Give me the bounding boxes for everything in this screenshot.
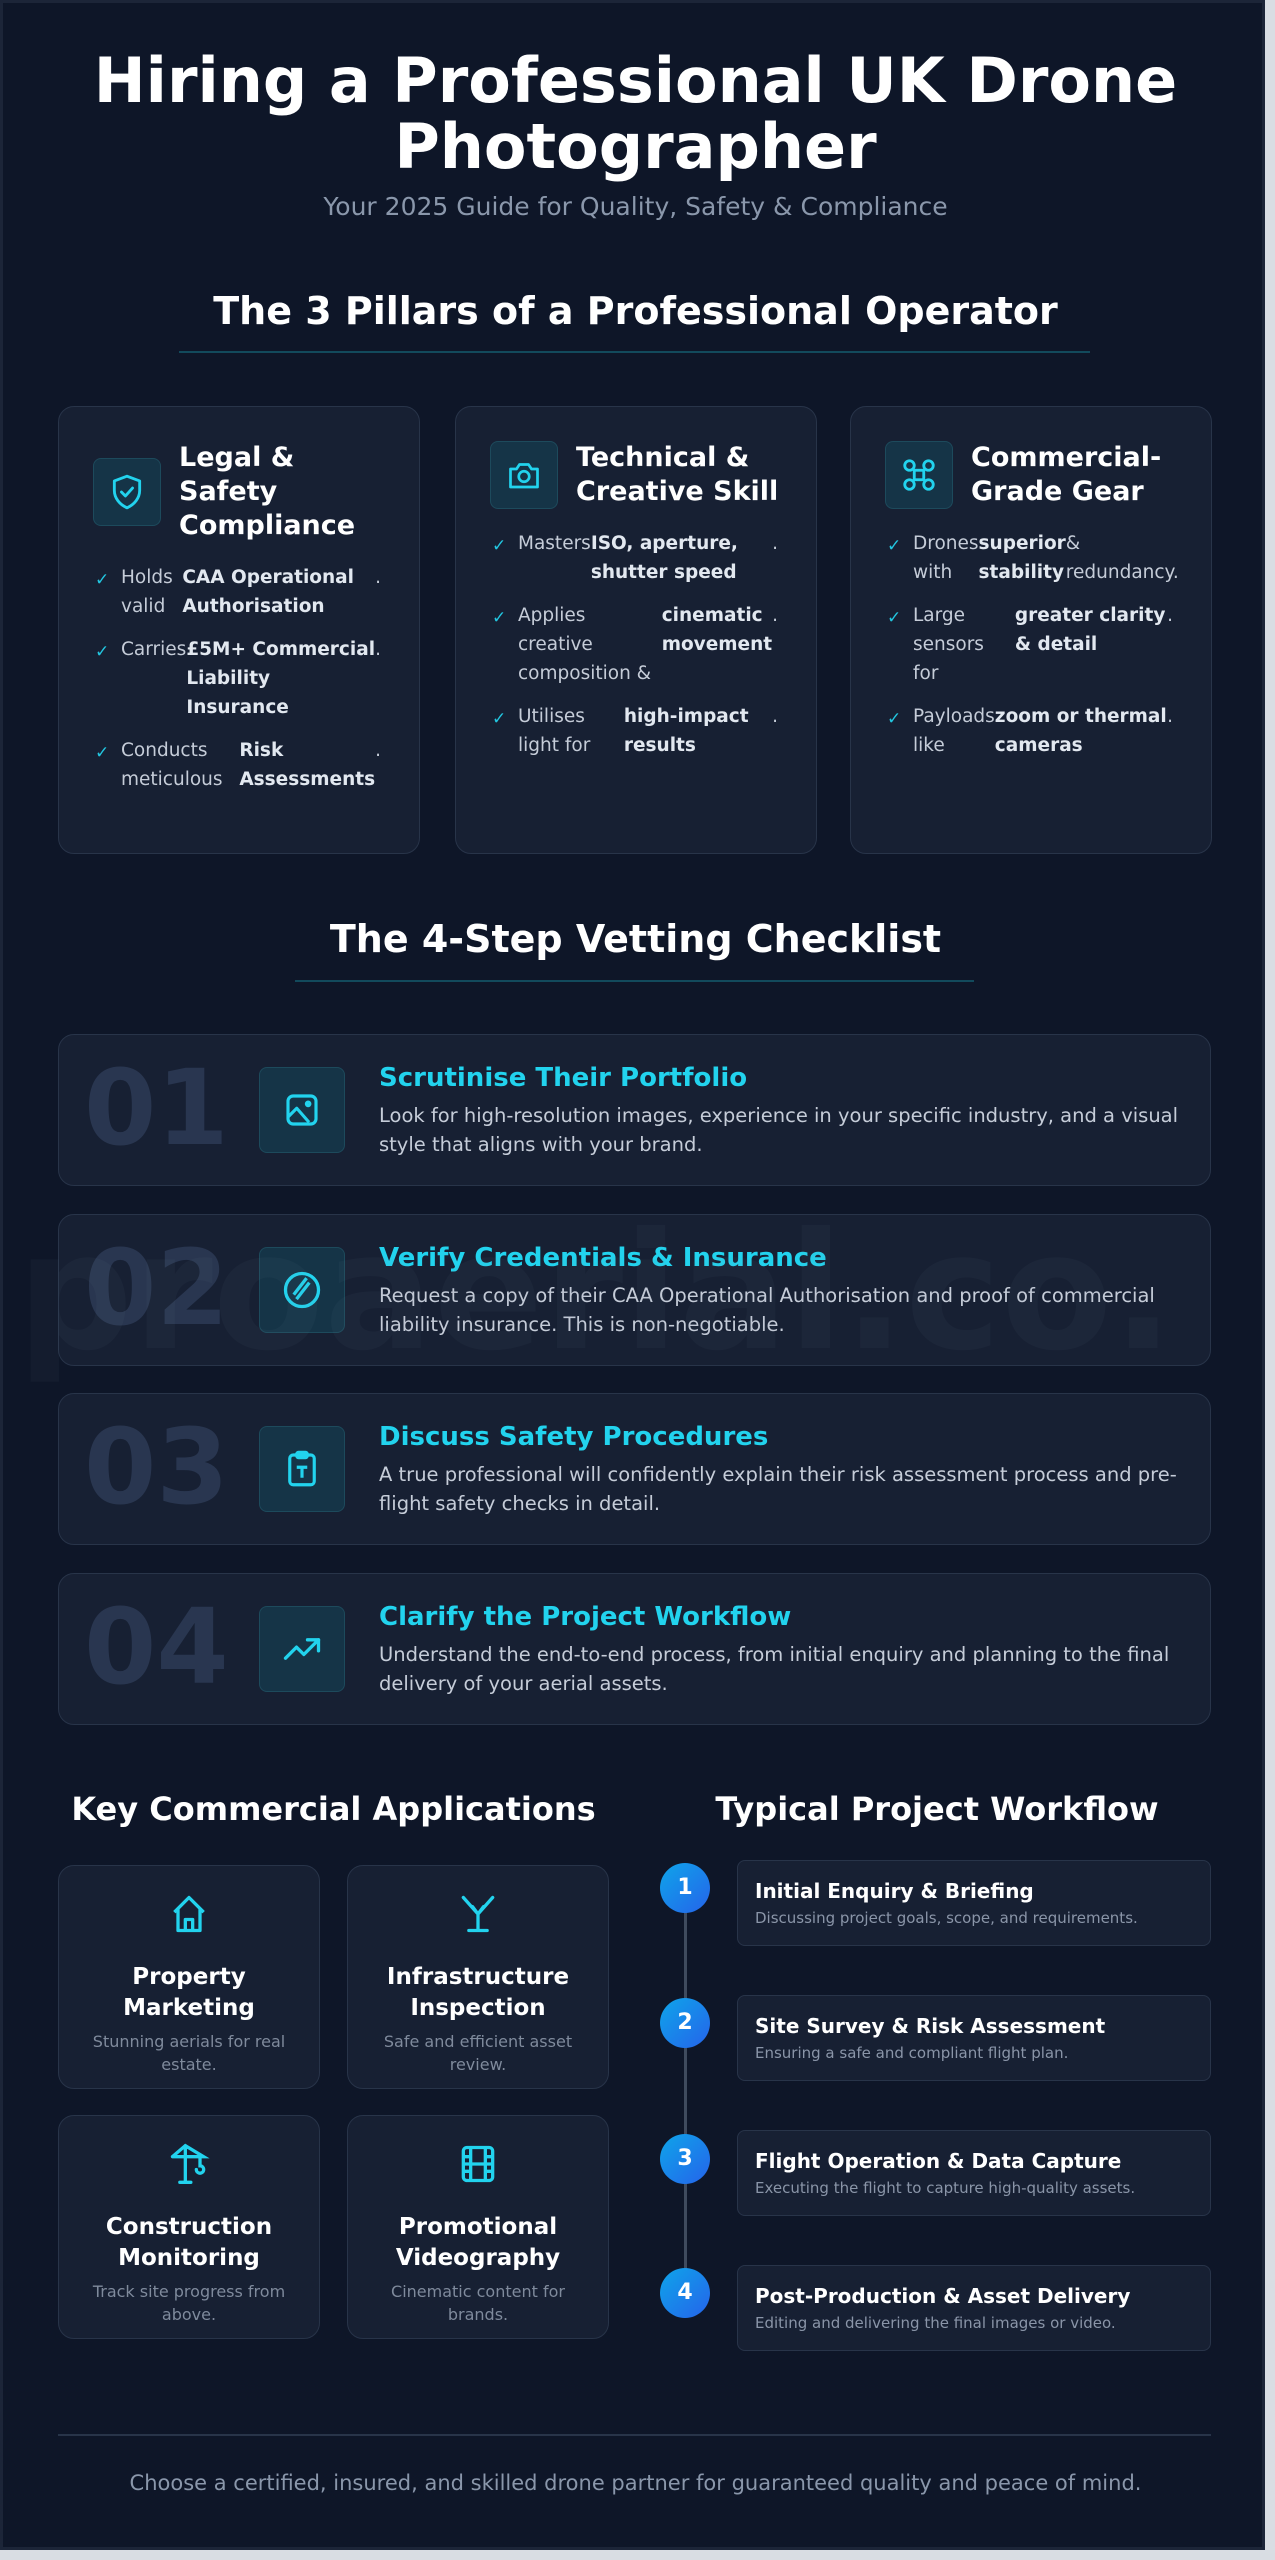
step 4: 04 (84, 1586, 229, 1708)
app: construction (58, 2115, 320, 2339)
panel: legal & safety: ✓ (95, 642, 109, 662)
workflow step 1: Discussing project goals, scope, and requirements. (755, 1909, 1138, 1927)
icon: drone (885, 441, 953, 509)
heading: checklist: The 4-Step Vetting Checklist (330, 917, 941, 961)
workflow step 2: Site Survey & Risk Assessment (755, 2014, 1105, 2038)
panel: gear: Payloads like . (913, 706, 1173, 756)
title: Photographer (394, 110, 877, 183)
heading: pillars: The 3 Pillars of a Professional Operator (213, 289, 1058, 333)
app: construction: Track site progress from above. (93, 2282, 285, 2324)
step 2: 02 (84, 1227, 229, 1349)
workflow step 3 (737, 2130, 1211, 2216)
panel: gear: ✓ (887, 608, 901, 628)
app: infrastructure: Safe and efficient asset review. (384, 2032, 572, 2074)
panel: legal & safety (58, 406, 420, 854)
step 1: Look for high-resolution images, experience in your specific industry, and a visual style that aligns with your brand. (379, 1104, 1178, 1156)
panel: legal & safety: Legal & (179, 442, 294, 473)
text: 1 (677, 1875, 693, 1900)
panel: gear: superior stability (979, 533, 1066, 583)
step 2 (58, 1214, 1211, 1366)
panel: gear: ✓ (887, 536, 901, 556)
icon: badge (259, 1247, 345, 1333)
panel: legal & safety: Conducts meticulous . (121, 740, 381, 790)
step 3: A true professional will confidently explain their risk assessment process and pre-flight safety checks in detail. (379, 1463, 1177, 1515)
text: 3 (677, 2146, 693, 2171)
step 4: Understand the end-to-end process, from initial enquiry and planning to the final delivery of your aerial assets. (379, 1643, 1169, 1695)
step 4: Clarify the Project Workflow (379, 1602, 791, 1632)
workflow step 4 (737, 2265, 1211, 2351)
panel: gear: Large sensors for . (913, 605, 1173, 684)
step 1: Scrutinise Their Portfolio (379, 1063, 747, 1093)
app: videography (347, 2115, 609, 2339)
app: construction: Monitoring (118, 2245, 260, 2271)
panel: legal & safety: Safety (179, 476, 277, 507)
panel: technical skill: Creative Skill (576, 476, 778, 507)
panel: technical skill: ISO, aperture, shutter speed (591, 533, 738, 583)
heading: workflow: Typical Project Workflow (715, 1790, 1159, 1828)
workflow step 2: Ensuring a safe and compliant flight plan. (755, 2044, 1068, 2062)
app: property: Property (132, 1964, 246, 1990)
step 3: Discuss Safety Procedures (379, 1422, 768, 1452)
step 2: Request a copy of their CAA Operational Authorisation and proof of commercial liability insurance. This is non-negotiable. (379, 1284, 1155, 1336)
app: construction: Construction (106, 2214, 272, 2240)
panel: legal & safety: Holds valid . (121, 567, 381, 617)
title: Hiring a Professional UK Drone (94, 44, 1177, 117)
panel: legal & safety: Risk Assessments (239, 740, 375, 790)
watermark: proaerial.co. (17, 1199, 1174, 1387)
workflow step 3: Executing the flight to capture high-quality assets. (755, 2179, 1135, 2197)
panel: gear: greater clarity & detail (1015, 605, 1165, 655)
heading: applications: Key Commercial Applications (71, 1790, 596, 1828)
panel: legal & safety: £5M+ Commercial Liability Insurance (186, 639, 375, 718)
panel: gear: zoom or thermal cameras (995, 706, 1167, 756)
step 3: 03 (84, 1406, 229, 1528)
workflow step 1: Initial Enquiry & Briefing (755, 1879, 1034, 1903)
panel: legal & safety: ✓ (95, 570, 109, 590)
panel: technical skill: ✓ (492, 709, 506, 729)
app: property: Marketing (123, 1995, 255, 2021)
workflow step 4: Post-Production & Asset Delivery (755, 2284, 1130, 2308)
step 2: Verify Credentials & Insurance (379, 1243, 827, 1273)
app: infrastructure: Infrastructure (387, 1964, 569, 1990)
step 4 (58, 1573, 1211, 1725)
workflow step 1 (737, 1860, 1211, 1946)
app: infrastructure: Inspection (410, 1995, 546, 2021)
panel: legal & safety: ✓ (95, 743, 109, 763)
app: property (58, 1865, 320, 2089)
panel: legal & safety: CAA Operational Authorisation (182, 567, 354, 617)
text: 4 (677, 2280, 693, 2305)
workflow step 2 (737, 1995, 1211, 2081)
panel: technical skill: Technical & (576, 442, 749, 473)
panel: legal & safety: Carries . (121, 639, 381, 660)
panel: gear (850, 406, 1212, 854)
footer text: Choose a certified, insured, and skilled drone partner for guaranteed quality and peace of mind. (130, 2471, 1141, 2495)
panel: technical skill: ✓ (492, 608, 506, 628)
app: infrastructure (347, 1865, 609, 2089)
panel: gear: Commercial- (971, 442, 1161, 473)
panel: technical skill: Applies creative composition & . (518, 605, 778, 684)
app: videography: Cinematic content for brands. (391, 2282, 565, 2324)
step 1 (58, 1034, 1211, 1186)
subtitle: Your 2025 Guide for Quality, Safety & Compliance (323, 192, 948, 221)
panel: technical skill: high-impact results (624, 706, 749, 756)
text: 2 (677, 2010, 693, 2035)
panel: technical skill: Masters . (518, 533, 778, 554)
panel: gear: Grade Gear (971, 476, 1144, 507)
icon: camera (490, 441, 558, 509)
workflow timeline (660, 1863, 710, 2318)
app: property: Stunning aerials for real estate. (93, 2032, 285, 2074)
app: videography: Videography (396, 2245, 560, 2271)
icon: shield (93, 458, 161, 526)
panel: gear: ✓ (887, 709, 901, 729)
title (94, 44, 1177, 183)
panel: technical skill: cinematic movement (662, 605, 772, 655)
panel: technical skill (455, 406, 817, 854)
step 3 (58, 1393, 1211, 1545)
icon: clipboard (259, 1426, 345, 1512)
panel: gear: Drones with & redundancy. (913, 533, 1179, 583)
step 1: 01 (84, 1047, 229, 1169)
workflow step 4: Editing and delivering the final images or video. (755, 2314, 1116, 2332)
app: videography: Promotional (399, 2214, 557, 2240)
panel: technical skill: Utilises light for . (518, 706, 778, 756)
panel: technical skill: ✓ (492, 536, 506, 556)
icon: image (259, 1067, 345, 1153)
workflow step 3: Flight Operation & Data Capture (755, 2149, 1121, 2173)
icon: trend (259, 1606, 345, 1692)
panel: legal & safety: Compliance (179, 510, 355, 541)
